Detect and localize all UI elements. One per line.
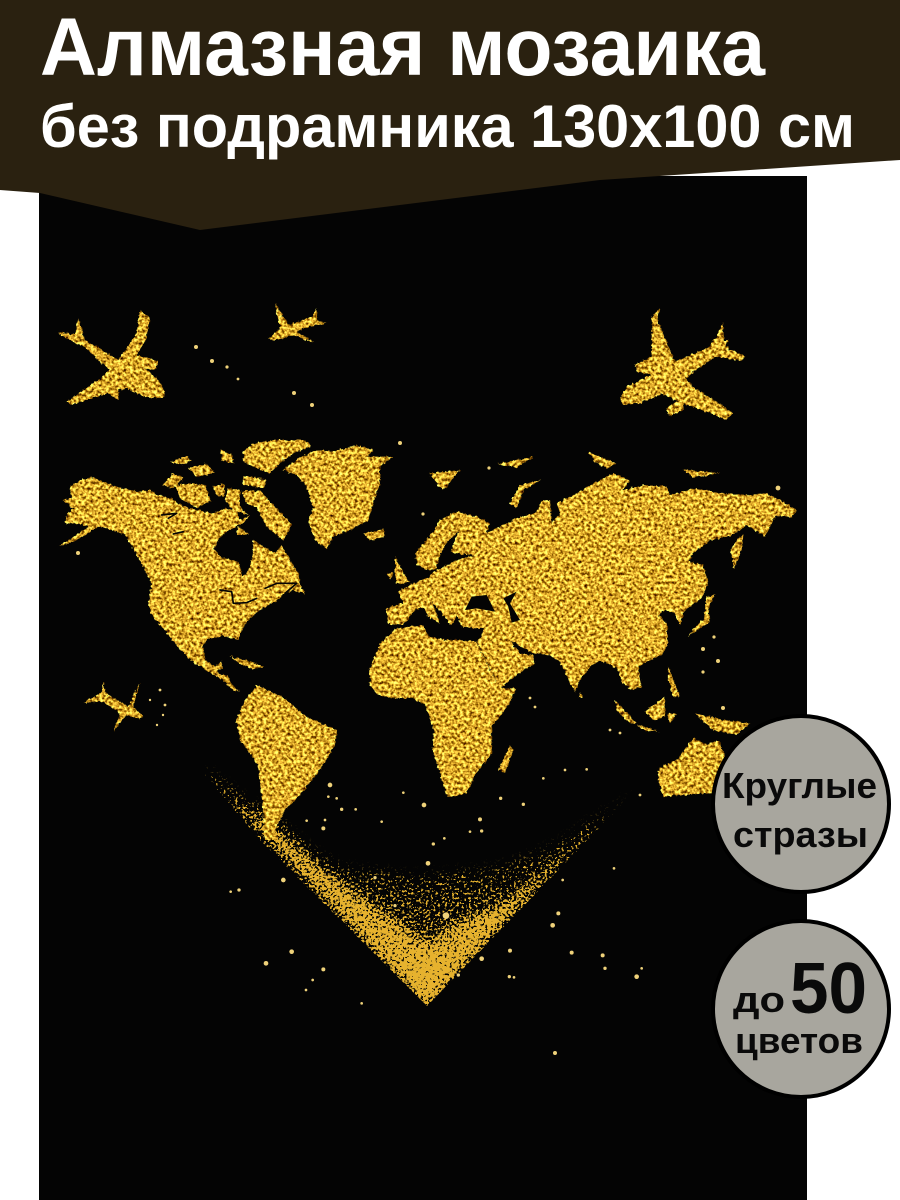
indonesia and philippines [615, 700, 637, 723]
plane: lower left [83, 682, 143, 732]
kamchatka [731, 535, 743, 569]
title line 1: Алмазная мозаика [40, 2, 766, 93]
great lakes [162, 513, 297, 603]
britain [395, 557, 409, 584]
black artwork panel [39, 176, 807, 1200]
eurasia [386, 473, 797, 692]
sparse interior dust [240, 805, 620, 1000]
word do: до [733, 979, 785, 1020]
south america [236, 685, 337, 840]
australia [658, 738, 760, 797]
badge text line 2: стразы [733, 814, 868, 855]
dense left edge [200, 770, 450, 1010]
header banner [0, 0, 900, 230]
badge: round rhinestones [713, 716, 889, 892]
madagascar [498, 745, 513, 773]
stars around the heart [229, 768, 643, 1005]
africa [369, 625, 517, 797]
world map [58, 303, 797, 840]
north america and arctic [58, 440, 393, 692]
eurasia, africa, islands [369, 452, 797, 797]
badge: up to 50 colours [713, 921, 889, 1097]
black sea and caspian [465, 592, 520, 623]
planes top left and top centre [58, 303, 326, 405]
gold heart-shaped dust [200, 770, 638, 1010]
dense right edge [405, 788, 638, 1010]
badge text line 1: Круглые [722, 765, 877, 806]
stars upper area [76, 345, 780, 1055]
plane: top right [620, 308, 746, 419]
word colours: цветов [735, 1020, 863, 1061]
greenland [283, 445, 393, 549]
japan [688, 595, 715, 637]
title [40, 2, 855, 160]
iceland [364, 529, 385, 541]
scattered gold stars [76, 345, 780, 1055]
title line 2: без подрамника 130х100 см [40, 93, 855, 160]
number 50: 50 [790, 949, 867, 1029]
inland seas and lakes [162, 513, 520, 623]
